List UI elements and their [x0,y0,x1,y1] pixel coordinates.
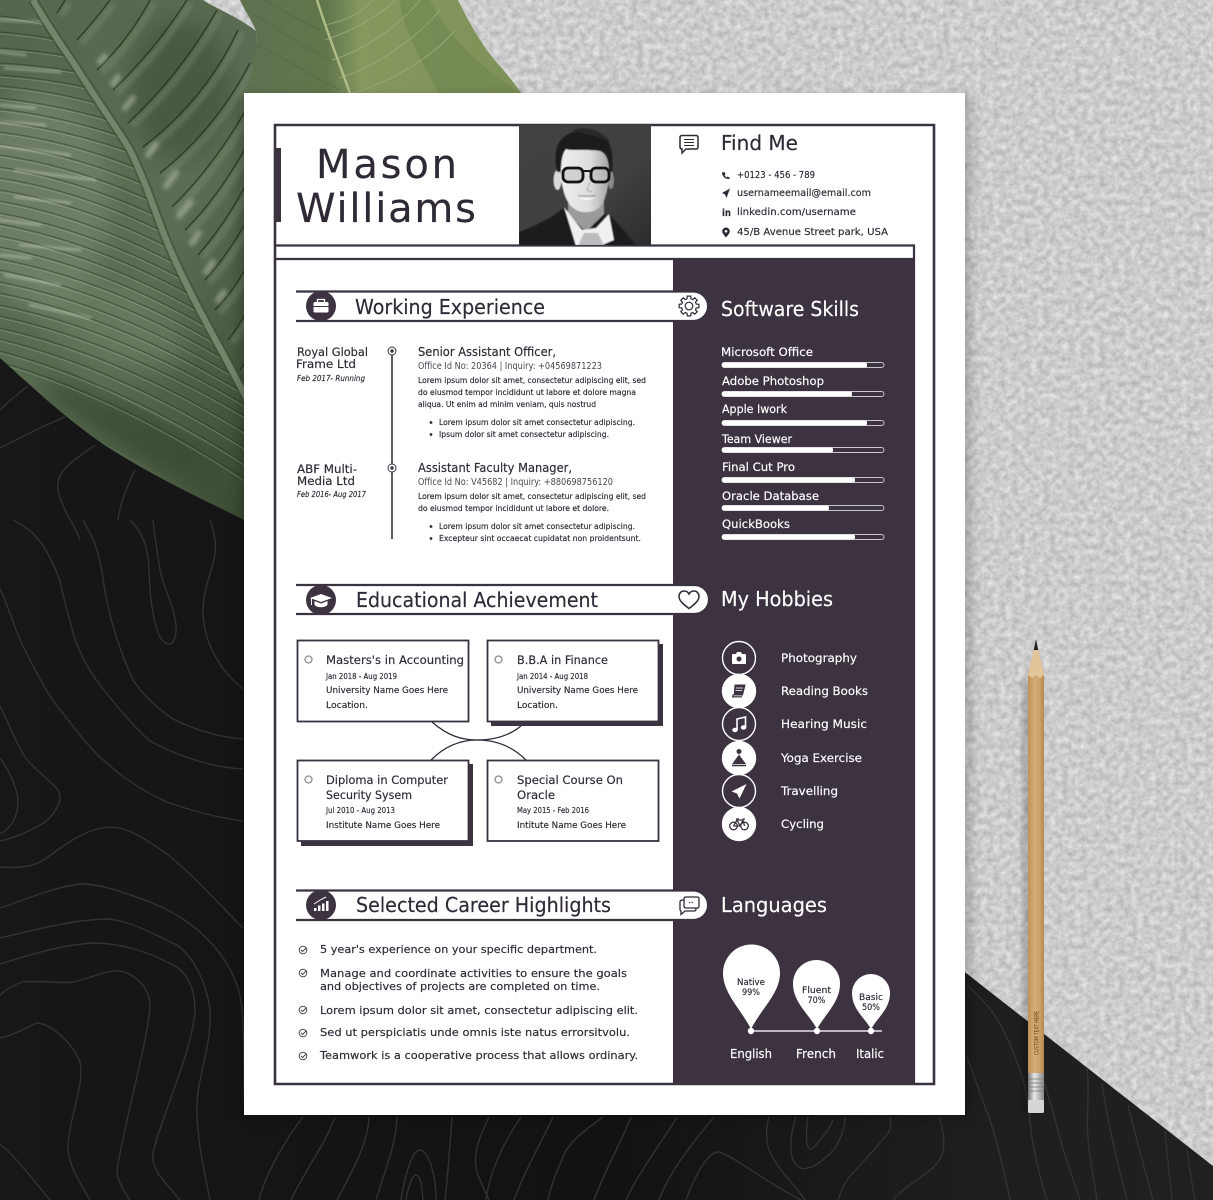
text: job 2: Excepteur sint occaecat cupidatat non proidentsunt. [439,534,641,543]
career highlights list [299,943,638,1062]
icon: paper plane [722,774,756,808]
language pin chart: Italic [856,1047,884,1061]
text: job 1: Frame Ltd [296,357,356,371]
heading: my hobbies: My Hobbies [721,587,833,611]
pin: french [793,960,840,1034]
pin: english: 99% [742,988,760,998]
skill bars: Team Viewer [721,432,792,446]
heading: selected career highlights [296,890,708,920]
language pin chart: English [730,1047,772,1061]
card: masters: University Name Goes Here [326,686,448,696]
paper shadow [240,97,970,1118]
icon: bar chart [306,890,336,920]
rib gloss patches [100,56,224,300]
text: job 2: Media Ltd [297,474,355,488]
career highlights list: Teamwork is a cooperative process that allows ordinary. [319,1049,638,1062]
icon: book [722,674,756,708]
header: find me contact block: +0123 - 456 - 789 [737,170,815,181]
heading: selected career highlights: Selected Career Highlights [356,893,611,917]
text: job 1: Ipsum dolor sit amet consectetur adipiscing. [439,430,609,439]
icon: gear [679,296,699,316]
icon: briefcase [306,291,336,321]
pin: french: Fluent [802,986,831,996]
text: job 1: Lorem ipsum dolor sit amet consectetur adipiscing. [439,418,635,427]
heading: software skills: Software Skills [721,297,859,321]
text: job 2: ABF Multi- [297,462,357,476]
pin: italic [852,974,890,1034]
skill bars: QuickBooks [722,517,790,531]
card: special course: Intitute Name Goes Here [517,821,626,831]
icon: linkedin: in [722,208,731,219]
card: bba [488,640,663,726]
text: job 1: aliqua. Ut enim ad minim veniam, quis nostrud [418,400,596,409]
connector arcs between education boxes [431,722,526,760]
card: diploma: Jul 2010 - Aug 2013 [325,806,395,815]
skill bars: Adobe Photoshop [722,374,824,388]
card: special course [488,760,658,841]
heading: working experience: Working Experience [355,295,545,319]
heading: languages: Languages [721,893,827,917]
text: job 1: Office Id No: 20364 | Inquiry: +04569871223 [418,361,602,372]
text: job 2: Lorem ipsum dolor sit amet consectetur adipiscing. [439,522,635,531]
icon: music note [722,708,756,740]
pin: italic: 50% [862,1003,880,1013]
section: work timeline [388,347,396,539]
resume paper [244,93,965,1115]
skill bars [721,345,884,540]
hobbies list: Cycling [781,817,824,831]
career highlights list: and objectives of projects are completed on time. [320,980,600,993]
career highlights list: Lorem ipsum dolor sit amet, consectetur adipiscing elit. [320,1004,638,1017]
career highlights list: 5 year's experience on your specific department. [320,943,597,956]
card: bba: Location. [517,701,558,711]
skill bars: Apple Iwork [722,402,787,416]
icon: heart [679,591,699,608]
header: find me contact block: 45/B Avenue Street park, USA [737,227,888,238]
hobbies list: Hearing Music [781,717,867,731]
hobbies list: Photography [781,651,857,665]
card: diploma [298,760,473,846]
text: job 2: Assistant Faculty Manager, [418,461,572,475]
header: find me contact block [680,131,888,238]
panel: dark sidebar [673,259,914,1084]
career highlights list: Sed ut perspiciatis unde omnis iste natus errorsitvolu. [320,1026,630,1039]
language pin chart [723,944,890,1061]
card: special course: Special Course On [517,773,623,787]
icon: yoga figure [722,741,756,775]
language pin chart: French [796,1047,836,1061]
card: masters: Location. [326,701,368,711]
career highlights list: Manage and coordinate activities to ensure the goals [320,967,627,980]
icon: speech bubble [680,136,698,153]
resume outer frame [275,125,934,1084]
heading: educational achievement [296,585,709,615]
skill bars: Oracle Database [722,489,819,503]
pin: english: Native [737,978,765,988]
icon: phone [722,172,730,179]
leaf gloss streaks [0,20,95,318]
icon: camera [722,642,756,674]
text: job 1: Feb 2017- Running [297,374,365,383]
text: job 2: do eiusmod tempor incididunt ut labore et dolore. [418,504,609,513]
icon: bicycle [722,807,756,841]
leaf: large dark green leaf [0,0,260,530]
hobbies list [722,642,868,841]
hobbies list: Travelling [780,784,838,798]
card: bba: B.B.A in Finance [517,653,608,667]
icon: location pin [722,228,730,238]
icon: paper plane [722,188,730,198]
card: diploma: Institute Name Goes Here [326,821,440,831]
card: diploma: Security Sysem [326,788,412,802]
header: find me contact block: usernameemail@email.com [737,188,871,199]
text: job 2: Feb 2016- Aug 2017 [297,490,367,499]
icon: chat bubbles [680,897,699,914]
text: job 2 [297,461,646,543]
header: find me contact block: linkedin.com/username [737,207,856,218]
hobbies list: Yoga Exercise [780,751,862,765]
text: job 1: do eiusmod tempor incididunt ut labore et dolore magna [418,388,636,397]
pencil: CUSTOM TEXT HERE [1034,1011,1040,1055]
card: special course: Oracle [517,788,555,802]
header: name [275,142,476,232]
text: job 1 [296,345,646,439]
card: masters [298,640,468,722]
text: job 1: Royal Global [297,345,368,359]
skill bars: Final Cut Pro [722,460,795,474]
header: find me contact block: Find Me [721,131,798,155]
text: job 1: Lorem ipsum dolor sit amet, consectetur adipiscing elit, sed [418,376,646,385]
card: diploma: Diploma in Computer [326,773,448,787]
card: bba: Jan 2014 - Aug 2018 [516,672,588,681]
heading: working experience [296,291,708,321]
icon: graduation cap [306,585,336,615]
pin: french: 70% [808,996,826,1006]
header: name: Williams [296,186,476,232]
pencil [1022,639,1044,1113]
pin: english [723,944,780,1034]
header: name: Mason [316,142,457,188]
skill bars: Microsoft Office [721,345,813,359]
hobbies list: Reading Books [781,684,868,698]
header: portrait photo [519,124,651,246]
card: masters: Jan 2018 - Aug 2019 [325,672,397,681]
card: bba: University Name Goes Here [517,686,638,696]
text: job 2: Office Id No: V45682 | Inquiry: +880698756120 [418,477,613,488]
text: job 2: Lorem ipsum dolor sit amet, consectetur adipiscing elit, sed [418,492,646,501]
text: job 1: Senior Assistant Officer, [418,345,556,359]
pin: italic: Basic [859,993,883,1003]
heading: educational achievement: Educational Achievement [356,588,598,612]
leaf: light green leaf [240,0,530,96]
card: special course: May 2015 - Feb 2016 [517,806,589,815]
card: masters: Masters's in Accounting [326,653,464,667]
